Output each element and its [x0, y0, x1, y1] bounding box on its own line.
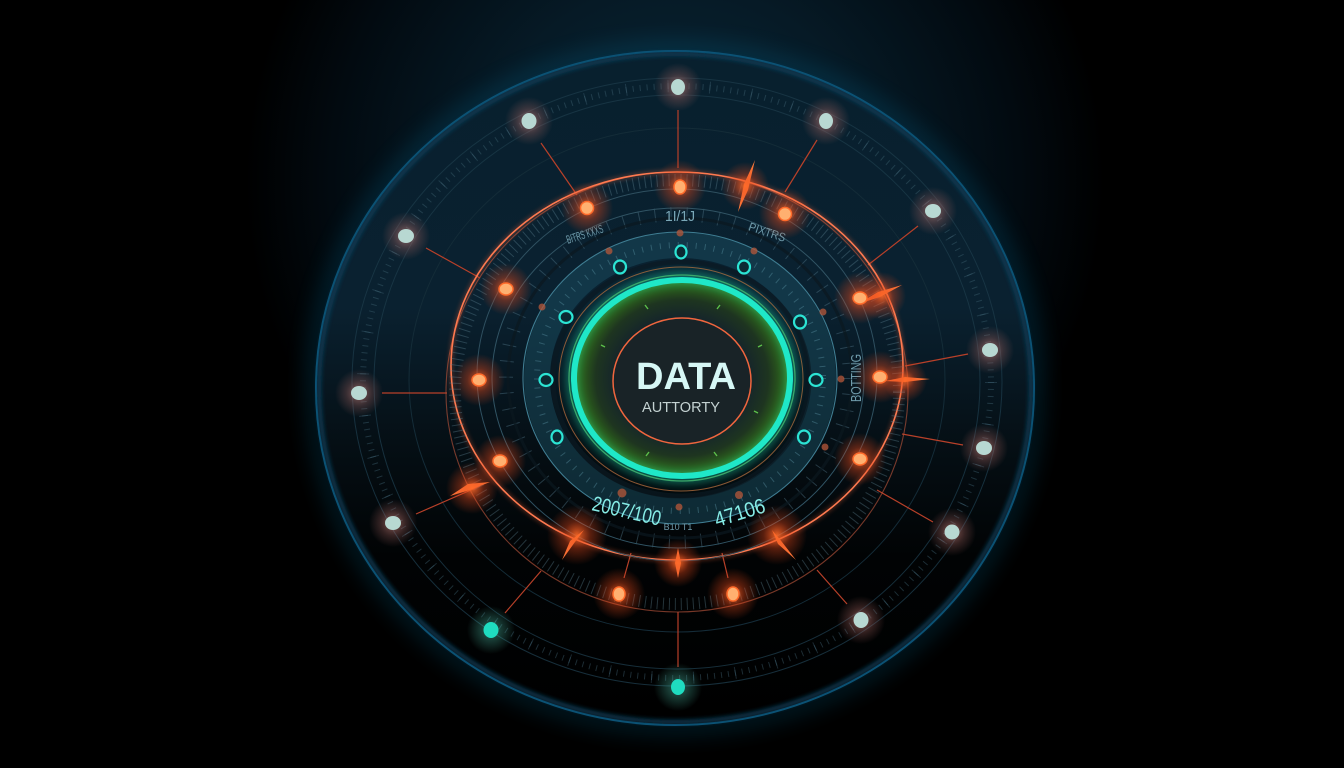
outer nodes	[335, 63, 1014, 711]
orange ring band with scale	[446, 172, 908, 612]
ring labels	[565, 208, 865, 532]
orange glow flares	[450, 160, 930, 578]
label: 2007/100: 2007/100	[590, 492, 663, 531]
label: top left scale: BITRS KXXS	[565, 222, 605, 247]
orange nodes	[453, 160, 906, 620]
blue instrument band	[508, 218, 852, 538]
outer disc with blue glowing rim	[316, 51, 1034, 725]
label: top right scale: PIXTRS	[747, 220, 787, 245]
label: top scale: 1I/1J	[665, 208, 695, 225]
central glowing hub	[569, 275, 795, 481]
small amber markers	[538, 230, 844, 510]
outer tick scale ring	[352, 78, 1002, 686]
subtitle: AUTORTY: AUTTORTY	[642, 399, 720, 416]
title: DATA: DATA	[636, 356, 736, 398]
label: right scale: BOTTING	[848, 354, 865, 402]
label: 47/06: 47106	[712, 495, 768, 532]
connector lines	[382, 110, 968, 667]
hub tick marks	[601, 305, 762, 456]
teal ring nodes	[540, 246, 822, 444]
label: bottom scale: B10 T1	[664, 522, 692, 532]
